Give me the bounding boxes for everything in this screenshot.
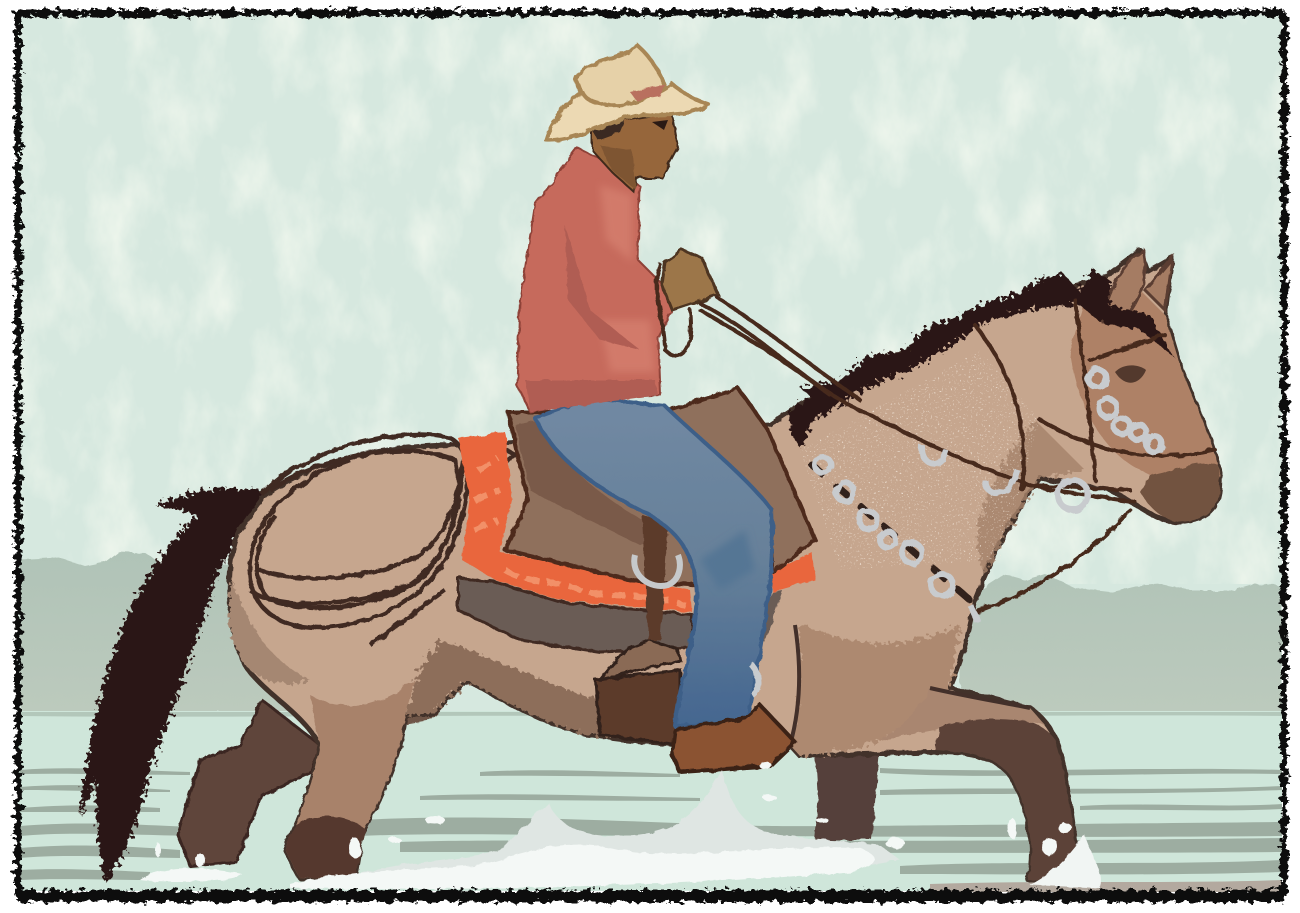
breast collar rings (815, 457, 978, 622)
stirrup strap (642, 515, 668, 640)
horse body (229, 250, 1220, 880)
belly and flank shading (405, 640, 700, 735)
shirt (517, 148, 672, 412)
jeans (535, 398, 773, 726)
forearm shade (880, 688, 1045, 740)
hat (546, 46, 708, 140)
stirrup tread (600, 640, 680, 680)
saddle (505, 388, 815, 745)
dark saddle pad (458, 578, 692, 652)
shoulder line (790, 625, 1030, 745)
mane (788, 270, 1172, 450)
right splash foam (1030, 835, 1101, 888)
background sky (18, 14, 1282, 714)
muzzle dark (1140, 463, 1219, 522)
body base (229, 250, 1220, 880)
jeans fold shadow (700, 530, 755, 590)
splash shadow (330, 770, 900, 889)
neck shade (600, 145, 636, 190)
glove hands (662, 250, 718, 310)
water (18, 711, 1282, 892)
hock dark (285, 816, 366, 878)
shoulder shading (790, 625, 960, 756)
ear (1103, 250, 1172, 325)
droplets (155, 761, 1072, 867)
hat band (630, 84, 665, 100)
fur speckles (800, 350, 1040, 570)
splash highlight (290, 845, 874, 889)
haunch lower shading (285, 680, 415, 878)
far hind thigh between legs (400, 678, 470, 725)
eye (1115, 365, 1146, 383)
shirt highlight (600, 185, 655, 372)
left splash foam (140, 868, 242, 882)
hat brim (546, 84, 708, 140)
neck rings (922, 445, 1018, 493)
rider hair (588, 112, 628, 140)
hat crown (576, 46, 668, 118)
saddle skirt shade (515, 420, 670, 545)
saddle front (668, 388, 815, 572)
head tan (1070, 290, 1220, 496)
rump side shading (229, 580, 310, 684)
water ripple bands (20, 712, 1282, 892)
stirrup fender (596, 670, 680, 745)
bridle rings (1088, 369, 1162, 452)
raised foreleg dark (935, 717, 1076, 880)
silver conchos (752, 369, 1162, 695)
horse tail (80, 488, 268, 882)
lariat rope (249, 435, 515, 645)
blanket pattern (474, 458, 685, 605)
sleeve shadow (525, 225, 658, 412)
far foreleg (814, 752, 880, 840)
neck shading behind jaw (977, 420, 1085, 575)
stirrup ring (634, 555, 680, 586)
bit ring (1058, 480, 1088, 510)
reins and bridle (657, 265, 1215, 612)
saddle blanket orange (458, 432, 815, 652)
rider (517, 46, 795, 772)
far hind leg (178, 700, 320, 866)
neck and face (592, 112, 678, 192)
distant treeline (20, 552, 1282, 712)
saddle skirt (505, 412, 700, 585)
boot ring (752, 665, 758, 695)
rider eye (652, 120, 668, 130)
water splash (140, 761, 1101, 889)
boot (672, 705, 795, 772)
